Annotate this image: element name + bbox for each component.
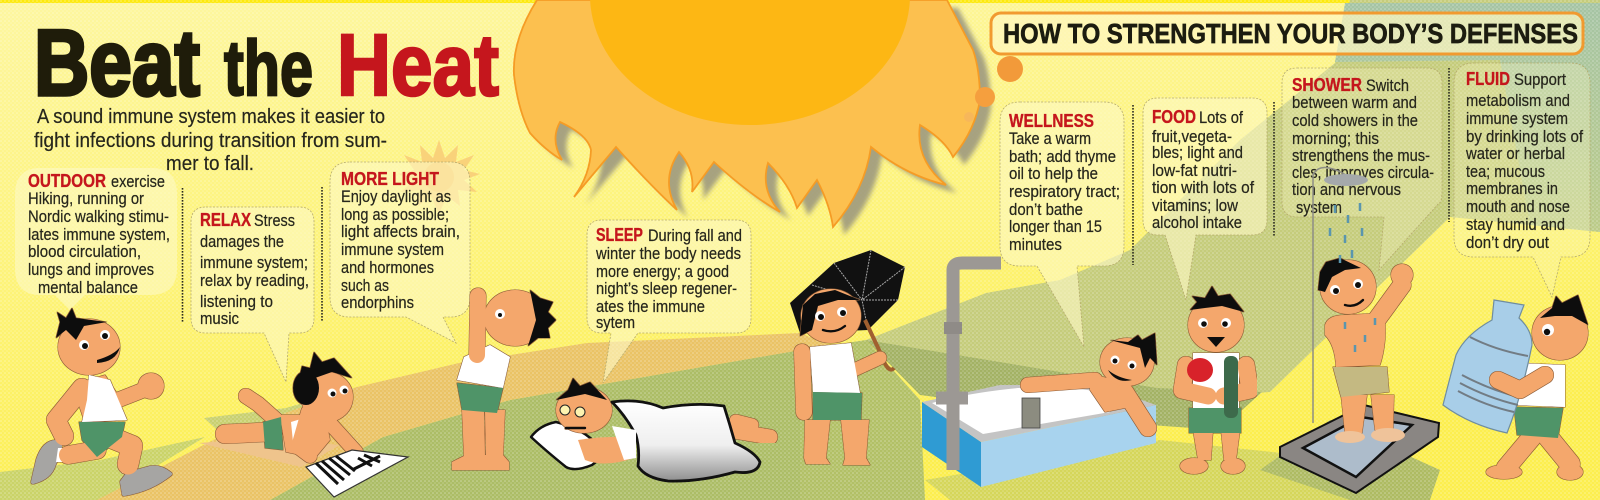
panel: food: vitamins; low (1152, 196, 1239, 215)
panel: shower: between warm and (1292, 93, 1417, 112)
illustration: boy stretching (452, 290, 556, 470)
panel: food: alcohol intake (1152, 213, 1242, 232)
panel: fluid: don’t dry out (1466, 233, 1549, 252)
panel: more light: such as (341, 276, 389, 295)
panel: outdoor: Hiking, running or (28, 189, 144, 208)
panel: sleep: winter the body needs (595, 244, 741, 263)
panel: sleep (587, 220, 751, 383)
panel: outdoor: blood circulation, (28, 242, 141, 261)
dividers (182, 68, 1449, 323)
panel: food (1143, 98, 1267, 300)
panel: shower: tion and nervous (1292, 180, 1401, 199)
panel: wellness: minutes (1009, 235, 1062, 254)
panel: relax: music (200, 309, 239, 328)
panel: relax: relax by reading, (200, 271, 309, 290)
title: the (224, 24, 313, 112)
panel: more light: endorphins (341, 293, 414, 312)
intro text (34, 106, 387, 175)
title (34, 10, 499, 115)
illustration: boy sleeping under blanket (531, 378, 770, 481)
panel: wellness: bath; add thyme (1009, 147, 1116, 166)
illustration: boy relaxing with book (199, 352, 408, 497)
panel: wellness: longer than 15 (1009, 217, 1102, 236)
panel: fluid: immune system (1466, 109, 1568, 128)
panel: food: low-fat nutri- (1152, 161, 1237, 180)
panel: shower: morning; this (1292, 129, 1379, 148)
intro text: A sound immune system makes it easier to (37, 106, 385, 128)
panel: sleep: ates the immune (596, 297, 705, 316)
panel: sleep: night’s sleep regener- (596, 279, 737, 298)
panel: outdoor: lates immune system, (28, 225, 170, 244)
title: Beat (34, 10, 200, 115)
panel: relax: damages the (200, 232, 284, 251)
panel: food: bles; light and (1152, 143, 1243, 162)
panel: fluid: Support (1514, 70, 1566, 89)
panel: more light: long as possible; (341, 205, 449, 224)
panel: fluid: tea; mucous (1466, 162, 1545, 181)
panel: food: fruit,vegeta- (1152, 127, 1232, 146)
panel: wellness: Take a warm (1009, 129, 1091, 148)
panel: more light (330, 162, 470, 343)
panel: more light: and hormones (341, 258, 434, 277)
panel: wellness: WELLNESS (1009, 110, 1094, 131)
panel: fluid: mouth and nose (1466, 197, 1570, 216)
panel: fluid (1454, 63, 1590, 297)
panel: more light: Enjoy daylight as (341, 187, 451, 206)
illustration: boy running (33, 308, 170, 494)
panel: shower (1282, 68, 1442, 270)
panel: wellness: respiratory tract; (1009, 182, 1120, 201)
panel: outdoor: exercise (111, 172, 165, 191)
illustration: boy with food (1180, 286, 1250, 474)
panel: sleep: sytem (596, 313, 635, 332)
panel: shower: cles, improves circula- (1292, 163, 1434, 182)
illustration: bathtub with pipe and boy (922, 263, 1157, 487)
panel: outdoor: OUTDOOR (28, 170, 106, 191)
title: Heat (337, 17, 499, 114)
illustration: boy with umbrella (790, 250, 905, 465)
panel: fluid: membranes in (1466, 179, 1558, 198)
intro text: fight infections during transition from sum- (34, 130, 387, 152)
panel: food: Lots of (1199, 108, 1243, 127)
intro text: mer to fall. (166, 153, 254, 175)
panel: shower: cold showers in the (1292, 111, 1418, 130)
panel: relax: listening to (200, 292, 273, 311)
panel: more light: light affects brain, (341, 222, 460, 241)
illustration: big sun (514, 0, 1023, 235)
panel: food: FOOD (1152, 106, 1196, 127)
panel: outdoor: Nordic walking stimu- (28, 207, 169, 226)
panel: outdoor: lungs and improves (28, 260, 154, 279)
panel: relax (191, 207, 314, 382)
panel: wellness (1000, 102, 1124, 347)
panel: sleep: SLEEP (596, 224, 643, 245)
icon: small sun (398, 140, 480, 214)
panel: sleep: more energy; a good (596, 262, 729, 281)
panel: fluid: FLUID (1466, 68, 1510, 89)
panel: relax: RELAX (200, 209, 252, 230)
panel: food: tion with lots of (1152, 178, 1254, 197)
illustration: boy with water bottle (1443, 295, 1588, 480)
panel: relax: Stress (254, 211, 295, 230)
illustration: shower tray and boy (1280, 168, 1439, 493)
panel: relax: immune system; (200, 253, 308, 272)
panel: more light: MORE LIGHT (341, 168, 440, 189)
panel: outdoor: mental balance (38, 278, 138, 297)
panel: wellness: oil to help the (1009, 164, 1098, 183)
panel: shower: Switch (1366, 76, 1409, 95)
panel: shower: SHOWER (1292, 74, 1362, 95)
panel: fluid: by drinking lots of (1466, 127, 1583, 146)
panel: fluid: water or herbal (1465, 144, 1565, 163)
panel: shower: system (1296, 198, 1342, 217)
panel: shower: strengthens the mus- (1292, 146, 1430, 165)
panel: fluid: metabolism and (1466, 91, 1570, 110)
panel: wellness: don’t bathe (1009, 200, 1083, 219)
panel: sleep: During fall and (648, 226, 742, 245)
panel: more light: immune system (341, 240, 444, 259)
panel: outdoor (15, 168, 177, 310)
panel: fluid: stay humid and (1466, 215, 1565, 234)
